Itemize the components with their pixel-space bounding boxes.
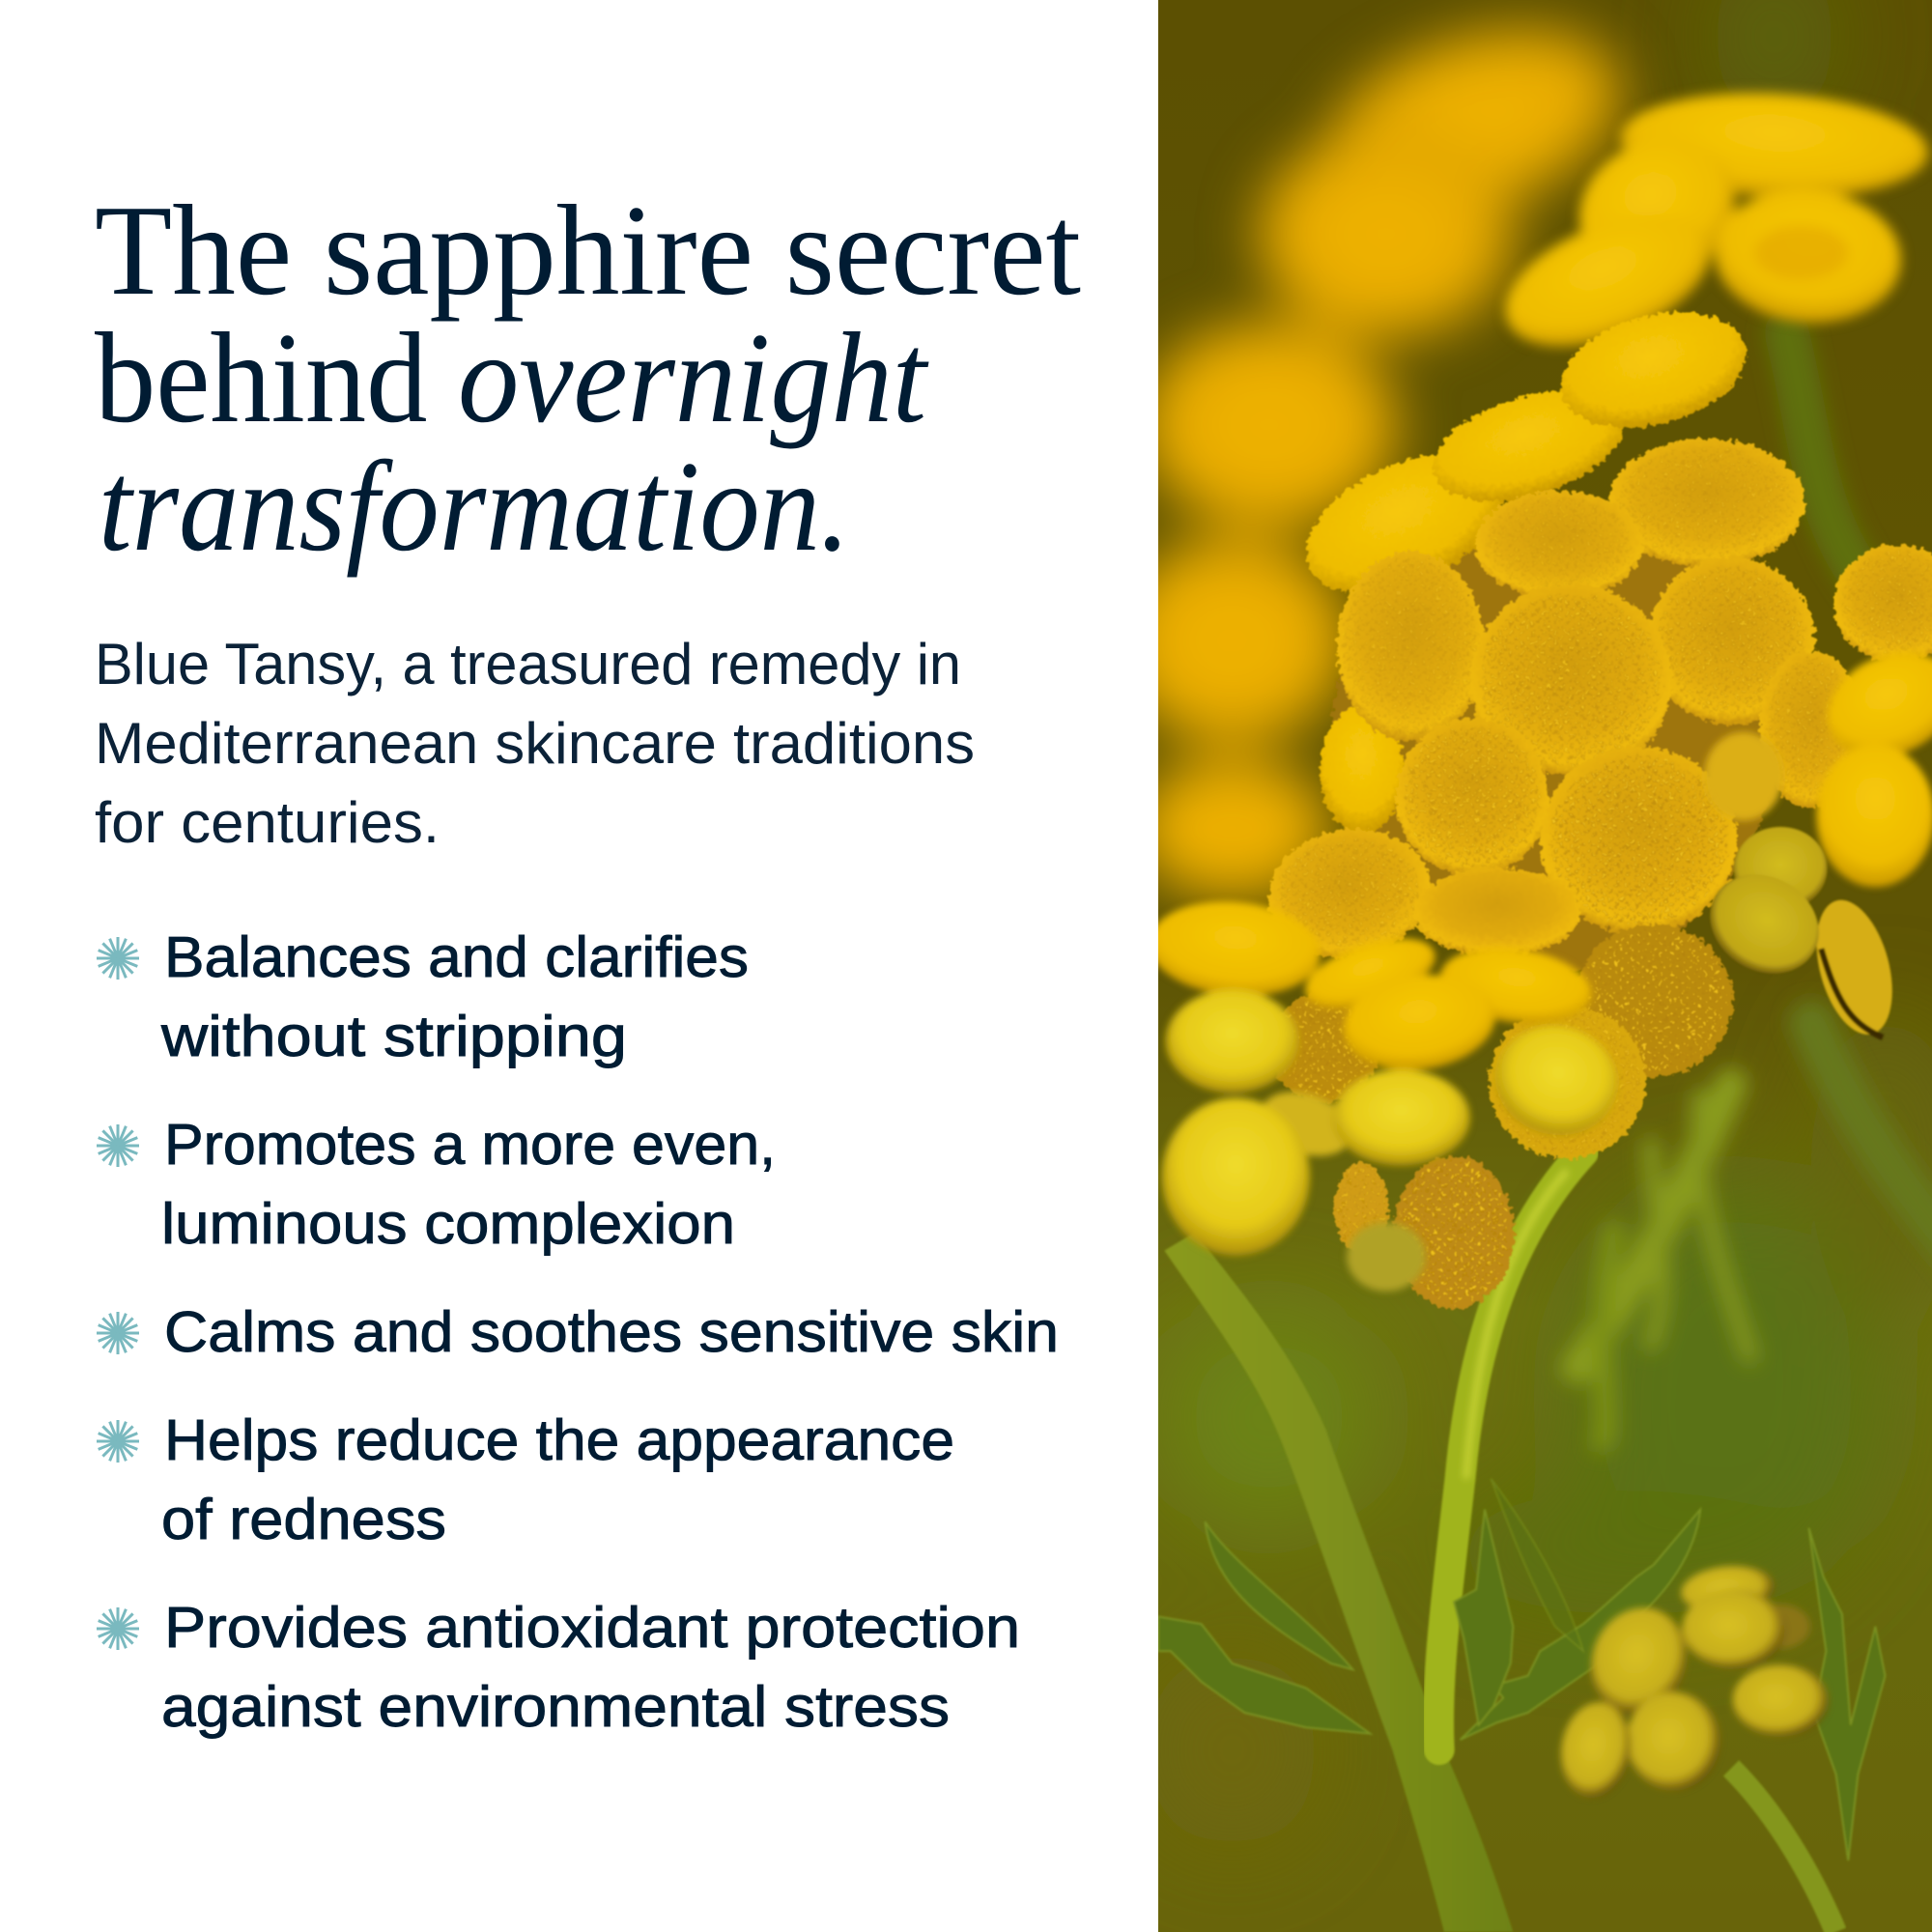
- bright right blossoms: [1704, 632, 1932, 887]
- benefit: even complexion: Promotes a more even,: [164, 1113, 776, 1177]
- blurred background blossoms: [1115, 0, 1645, 899]
- blurred back stems and foliage: [1577, 332, 1932, 1441]
- out of focus foreground blossoms: [1145, 895, 1630, 1292]
- icon: teal starburst: [97, 1124, 139, 1167]
- intro text: Mediterranean skincare traditions: [95, 711, 975, 776]
- blurred green foliage: [1146, 0, 1932, 1848]
- benefit: reduces redness: [97, 1408, 954, 1551]
- icon: teal starburst: [97, 1312, 139, 1354]
- intro text: [95, 632, 975, 855]
- title: The sapphire secret: [95, 179, 1081, 322]
- benefit: balances and clarifies: without stripping: [160, 1005, 627, 1068]
- benefit: antioxidant protection: [97, 1596, 1020, 1739]
- benefit: reduces redness: of redness: [161, 1488, 446, 1551]
- curved stem: [1438, 1152, 1583, 1749]
- title: behind overnight: [95, 306, 929, 449]
- benefit: reduces redness: Helps reduce the appearance: [164, 1408, 954, 1472]
- benefit: antioxidant protection: Provides antioxidant protection: [164, 1596, 1020, 1660]
- benefit: balances and clarifies: Balances and clarifies: [164, 925, 749, 989]
- photo background: [1158, 0, 1932, 1932]
- closed olive buds: [1691, 827, 1906, 1043]
- intro text: for centuries.: [95, 790, 440, 855]
- lower right thin stem: [1731, 1768, 1836, 1932]
- title: [95, 179, 1081, 578]
- lower right bud cluster: [1553, 1561, 1829, 1803]
- panel: text column: [95, 179, 1081, 1739]
- title: transformation.: [99, 435, 850, 578]
- icon: teal starburst: [97, 1420, 139, 1463]
- icon: teal starburst: [97, 1607, 139, 1650]
- benefit: even complexion: luminous complexion: [161, 1192, 735, 1256]
- intro text: Blue Tansy, a treasured remedy in: [95, 632, 961, 696]
- main stem: [1164, 1233, 1513, 1932]
- serrated leaves: [1158, 1479, 1886, 1861]
- benefit: even complexion: [97, 1113, 776, 1256]
- icon: teal starburst: [97, 937, 139, 980]
- benefit: antioxidant protection: against environmental stress: [161, 1675, 950, 1739]
- textured foreground florets: [1269, 992, 1646, 1309]
- focus flower cluster: [1258, 293, 1932, 1077]
- benefit: balances and clarifies: [97, 925, 749, 1068]
- blurred top cluster: [1487, 86, 1931, 373]
- photo: yellow tansy flowers: [1158, 0, 1932, 1932]
- benefit: calms sensitive skin: Calms and soothes sensitive skin: [164, 1300, 1059, 1364]
